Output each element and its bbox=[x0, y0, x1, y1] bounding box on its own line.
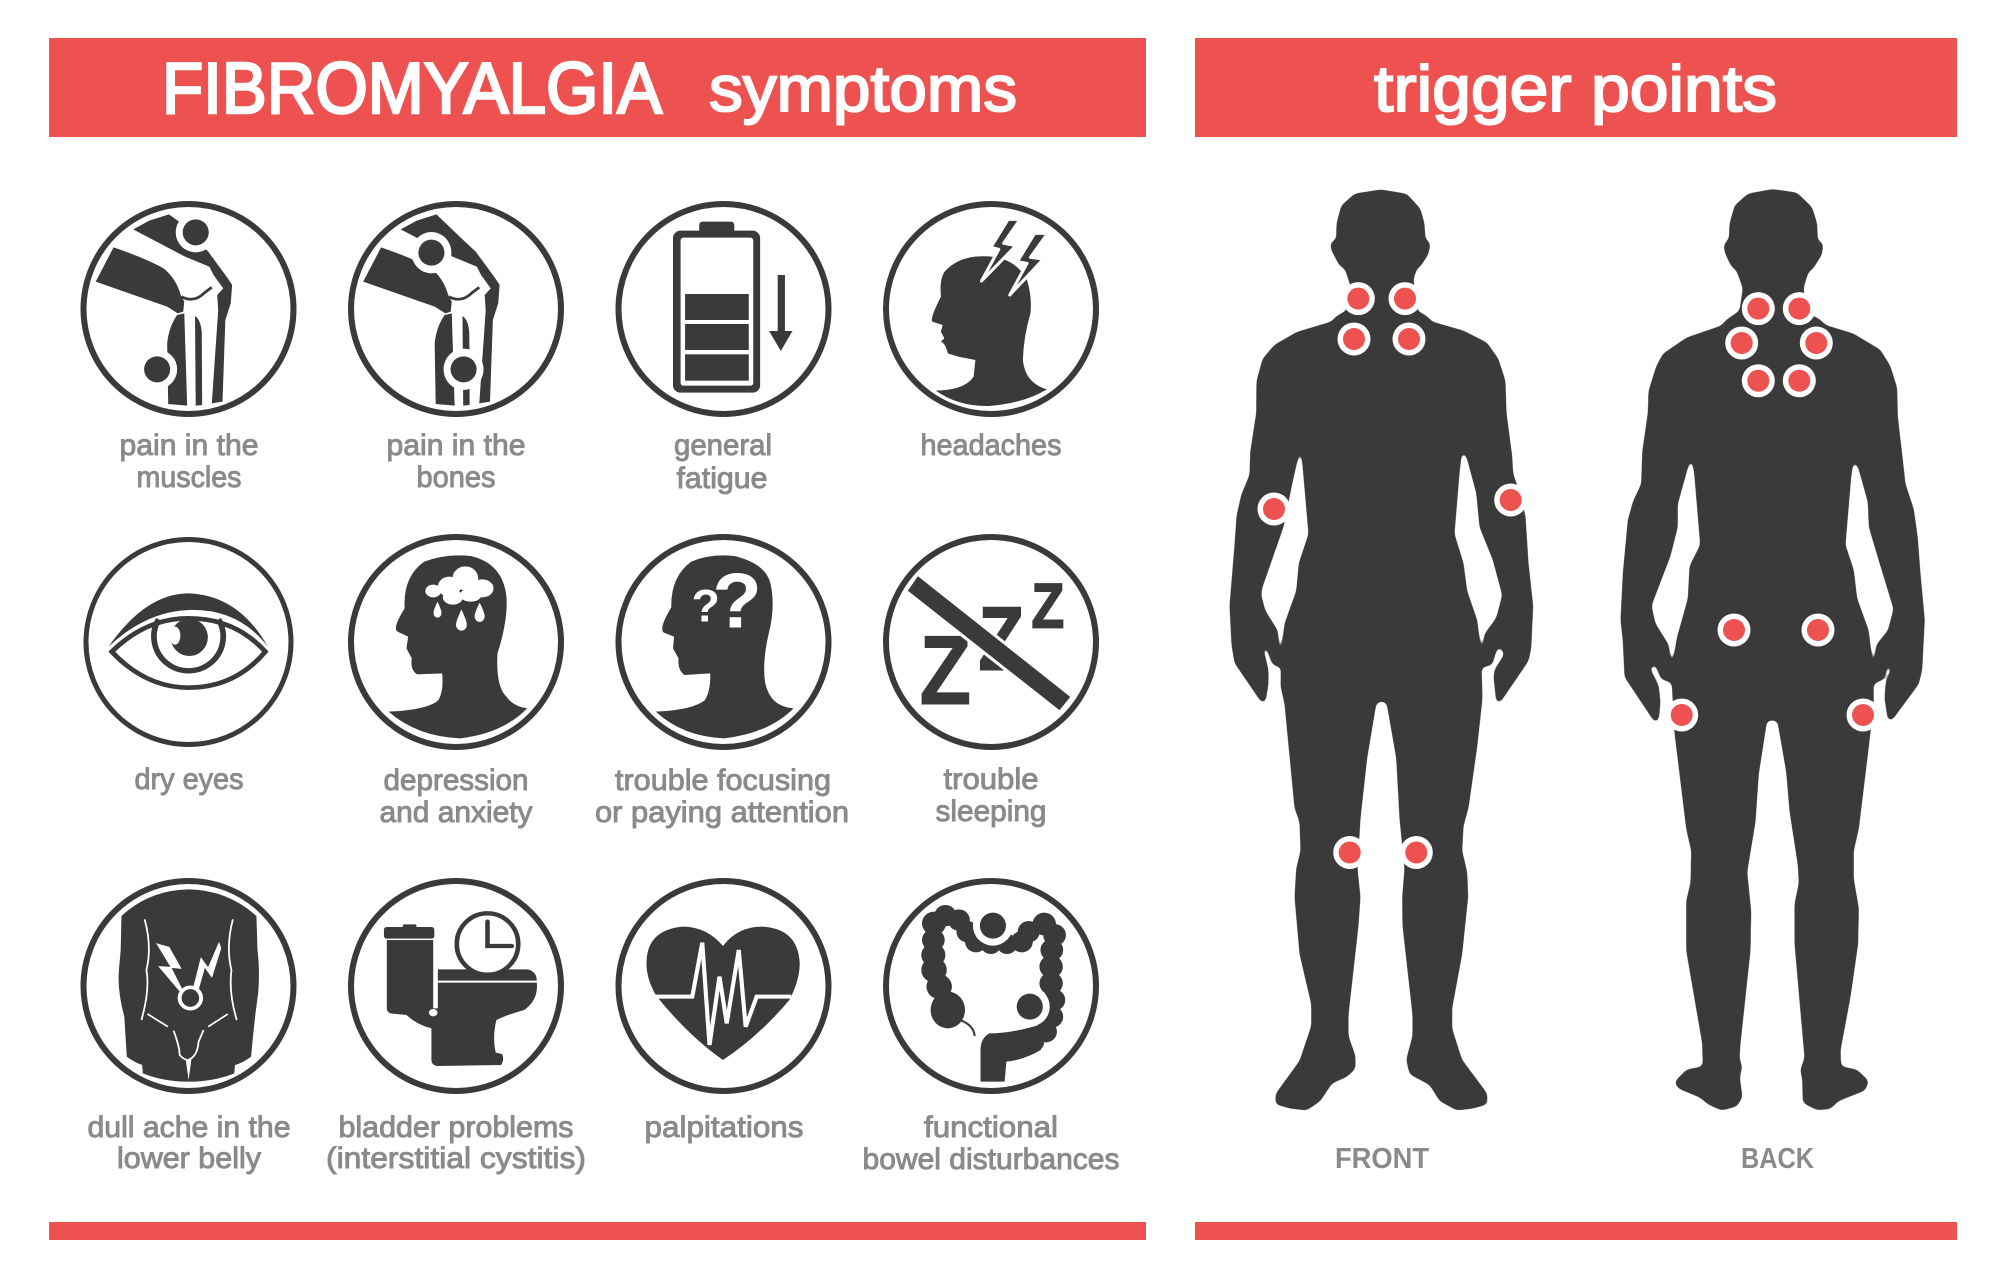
footer bar: trigger points bbox=[1195, 1222, 1957, 1240]
label: functional bbox=[924, 1111, 1058, 1144]
heading: fibromyalgia symptoms: symptoms bbox=[709, 52, 1017, 125]
panel: symptoms bbox=[49, 38, 1146, 1240]
symptom: dry eyes bbox=[86, 540, 291, 796]
label: dry eyes bbox=[134, 763, 244, 796]
label bbox=[120, 429, 258, 494]
icon: crossed out Z letters bbox=[886, 537, 1096, 747]
symptom: pain in the bones bbox=[351, 204, 561, 494]
symptom: headaches bbox=[886, 204, 1096, 462]
label bbox=[386, 429, 526, 494]
footer bar: symptoms bbox=[49, 1222, 1146, 1240]
symptom: bladder problems bbox=[326, 881, 586, 1175]
label: pain in the bbox=[120, 429, 258, 462]
label bbox=[380, 764, 532, 829]
label bbox=[595, 764, 849, 829]
label: fatigue bbox=[676, 462, 768, 495]
silhouette: front bbox=[1230, 190, 1533, 1110]
silhouette: back bbox=[1621, 190, 1924, 1110]
icon: knee with bone pain bbox=[351, 204, 561, 414]
label bbox=[326, 1111, 586, 1175]
symptom: palpitations bbox=[618, 881, 828, 1144]
heading: fibromyalgia symptoms bbox=[49, 38, 1146, 137]
trigger markers: front bbox=[1258, 282, 1527, 869]
figure: back body bbox=[1621, 190, 1924, 1175]
label bbox=[862, 1111, 1120, 1176]
label: muscles bbox=[136, 461, 242, 494]
label: depression bbox=[384, 764, 528, 797]
icon: knee with muscle pain bbox=[84, 204, 294, 414]
label bbox=[674, 429, 772, 495]
icon: head with rain cloud bbox=[351, 537, 561, 747]
label: general bbox=[674, 429, 772, 462]
label: and anxiety bbox=[380, 796, 532, 829]
icon: heart with heartbeat line bbox=[618, 881, 828, 1091]
label: palpitations bbox=[644, 1111, 804, 1144]
icon: low battery bbox=[618, 204, 828, 414]
label: pain in the bbox=[386, 429, 526, 462]
trigger markers: back bbox=[1665, 292, 1880, 732]
label: trouble bbox=[944, 763, 1038, 796]
symptom: general fatigue bbox=[618, 204, 828, 495]
icon: head with lightning bolts bbox=[886, 204, 1096, 414]
icon: crossed out Z letters: Z bbox=[978, 588, 1024, 690]
symptom: depression and anxiety bbox=[351, 537, 561, 829]
label: bones bbox=[416, 461, 496, 494]
symptom: pain in the muscles bbox=[84, 204, 294, 494]
symptom: trouble sleeping bbox=[886, 537, 1096, 828]
label: trouble focusing bbox=[615, 764, 831, 797]
symptom: functional bowel disturbances bbox=[862, 881, 1120, 1176]
symptom: dull ache in the lower belly bbox=[84, 881, 294, 1175]
icon: toilet with clock bbox=[351, 881, 561, 1091]
label: front: FRONT bbox=[1335, 1143, 1429, 1175]
label: sleeping bbox=[936, 795, 1046, 828]
label: lower belly bbox=[117, 1142, 261, 1175]
icon: lower abdomen bbox=[84, 881, 294, 1091]
icon: crossed out Z letters: Z bbox=[920, 615, 971, 726]
heading: fibromyalgia symptoms: FIBROMYALGIA bbox=[162, 49, 662, 129]
icon: head with question marks: ? bbox=[712, 557, 762, 644]
label: bladder problems bbox=[338, 1111, 574, 1144]
label: dull ache in the bbox=[88, 1111, 290, 1144]
heading: trigger points: trigger points bbox=[1374, 52, 1777, 125]
icon: head with question marks: ? bbox=[692, 581, 720, 632]
icon: eye bbox=[86, 540, 291, 744]
icon: colon bbox=[886, 881, 1096, 1091]
label bbox=[936, 763, 1046, 828]
symptom: trouble focusing bbox=[595, 537, 849, 829]
label: (interstitial cystitis) bbox=[326, 1142, 586, 1175]
label: bowel disturbances bbox=[862, 1143, 1120, 1176]
icon: crossed out Z letters: Z bbox=[1031, 570, 1064, 641]
label bbox=[88, 1111, 290, 1175]
panel: trigger points bbox=[1195, 38, 1957, 1240]
heading: trigger points bbox=[1195, 38, 1957, 137]
label: or paying attention bbox=[595, 796, 849, 829]
label: back: BACK bbox=[1741, 1143, 1814, 1175]
label: headaches bbox=[920, 429, 1062, 462]
figure: front body bbox=[1230, 190, 1533, 1175]
icon: head with question marks bbox=[618, 537, 828, 747]
